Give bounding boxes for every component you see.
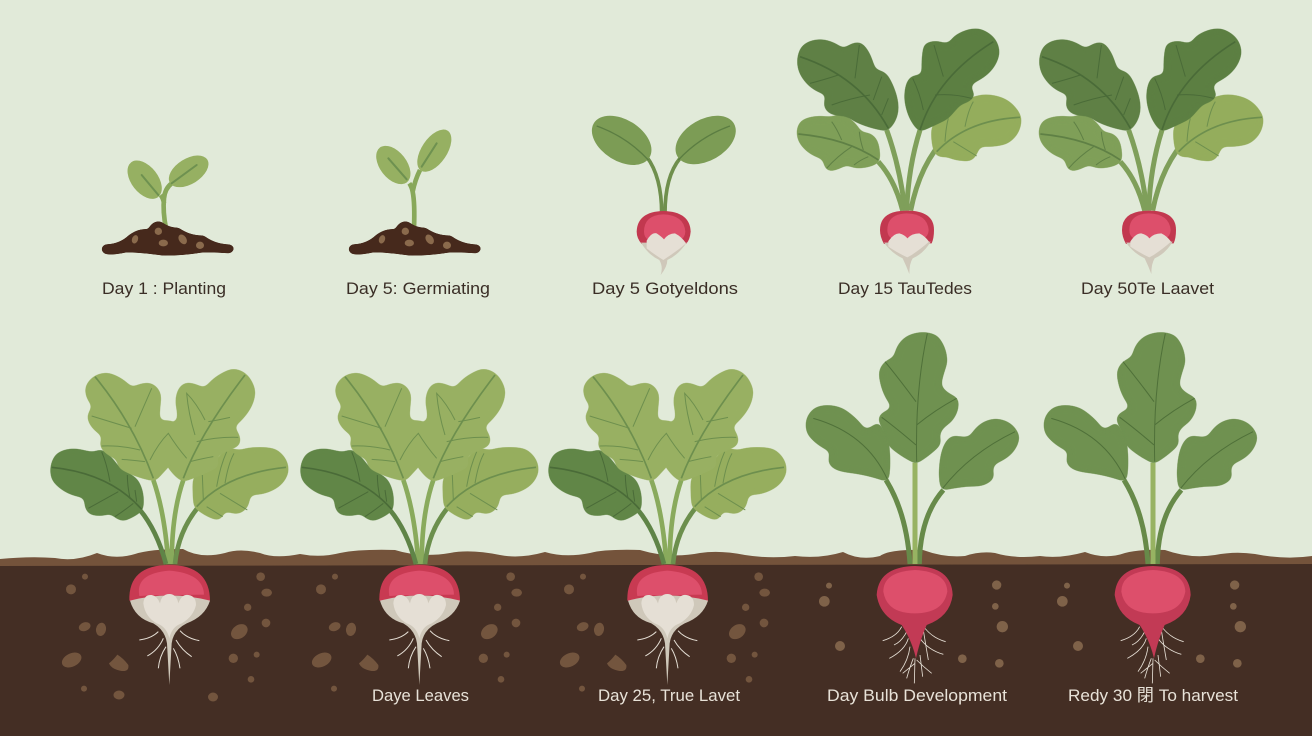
lower right leaf <box>932 96 1020 160</box>
radish bulb <box>129 565 210 685</box>
label: leaves: Daye Leaves <box>372 686 469 705</box>
right cotyledon <box>667 106 744 174</box>
left leaf <box>121 154 169 205</box>
row 2 plant copy <box>549 370 785 692</box>
bulb development plant <box>807 333 1018 683</box>
stems <box>886 463 943 564</box>
upper right leaf <box>906 30 998 131</box>
label: day 5 germinating: Day 5: Germiating <box>346 279 490 298</box>
veins <box>597 126 730 160</box>
stems <box>140 480 200 564</box>
left leaf <box>369 139 417 191</box>
upper left leaf <box>86 374 180 480</box>
label: day 15: Day 15 TauTedes <box>838 279 972 298</box>
stem <box>161 183 172 228</box>
right leaf <box>163 149 214 194</box>
harvest plant <box>1045 333 1256 683</box>
stage 3 cotyledon plant <box>583 105 744 275</box>
roots <box>883 627 946 683</box>
stage 4 young plant with four leaves <box>798 30 1020 274</box>
left leaf <box>807 406 889 481</box>
leaf veins <box>142 165 197 195</box>
soil stones <box>59 572 272 692</box>
stems <box>647 157 680 213</box>
label: day 50: Day 50Te Laavet <box>1081 279 1214 298</box>
leaf veins <box>388 143 437 179</box>
soil mound <box>102 222 233 255</box>
label: day 1: Day 1 : Planting <box>102 279 226 298</box>
soil ground <box>0 549 1312 736</box>
extra stones under first plant <box>114 690 218 702</box>
stage 5 young plant <box>1040 30 1262 274</box>
stage 2 seedling with soil mound <box>349 124 480 255</box>
label: ready to harvest: Redy 30 閉 To harvest <box>1068 686 1238 705</box>
stem <box>409 170 420 228</box>
small radish bulb <box>880 211 934 274</box>
stage 1 seedling with soil mound <box>102 149 233 255</box>
upper right leaf <box>92 370 254 481</box>
pebbles <box>131 228 204 249</box>
red bulb <box>877 566 953 658</box>
lower left leaf <box>798 116 879 170</box>
centre leaf <box>880 333 957 463</box>
soil stones <box>819 580 1008 668</box>
left dark leaf <box>51 450 143 520</box>
right light leaf <box>194 448 287 519</box>
row 2 plant copy <box>301 370 537 692</box>
roots <box>139 631 199 668</box>
label: day 25: Day 25, True Lavet <box>598 686 740 705</box>
label: day 5 cotyledons: Day 5 Gotyeldons <box>592 279 738 298</box>
label: bulb development: Day Bulb Development <box>827 686 1007 705</box>
stems <box>878 130 947 211</box>
right leaf <box>940 420 1018 489</box>
soil mound <box>349 222 480 255</box>
row 2 plant with white-bottom bulb <box>51 370 287 692</box>
pebbles <box>378 228 451 249</box>
upper left leaf <box>798 41 897 130</box>
left cotyledon <box>583 105 660 175</box>
small radish bulb <box>637 211 691 275</box>
right leaf <box>410 124 458 178</box>
